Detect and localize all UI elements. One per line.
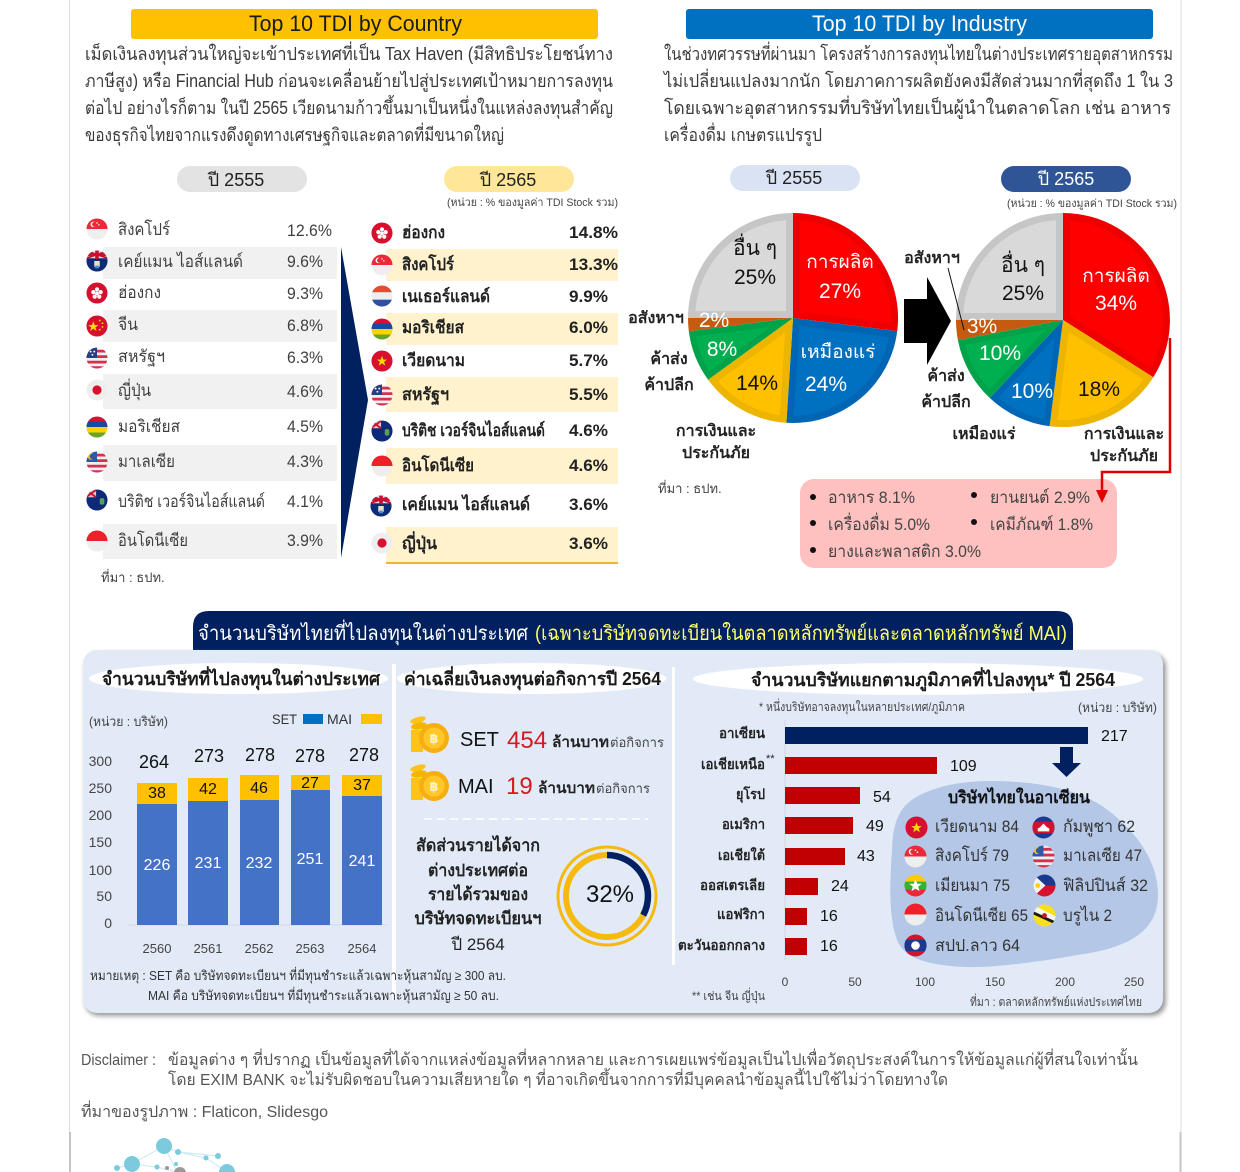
pie chart: 2555: 27%	[819, 280, 861, 303]
note: north Asia: ** เช่น จีน ญี่ปุ่น	[692, 987, 765, 1004]
bar chart: companies by year: MAI	[327, 711, 352, 727]
bar chart: companies by region: 250	[1124, 975, 1144, 989]
pie labels: 2565: ค้าปลีก	[921, 392, 971, 411]
ranking list: 2555: 6.3%	[287, 348, 323, 367]
year pill: country 2565: ปี 2565	[479, 170, 536, 190]
sub-heading: companies abroad: จำนวนบริษัทที่ไปลงทุนในต่างประเทศ	[102, 666, 381, 691]
bar chart: companies by year: 46	[250, 780, 268, 797]
unit note: country: (หน่วย : % ของมูลค่า TDI Stock รวม)	[447, 197, 618, 209]
pie labels: 2565: การเงินและ	[1084, 425, 1164, 443]
panel: Thai companies in ASEAN: มาเลเซีย 47	[1063, 846, 1142, 865]
bar chart: companies by region: 24	[831, 878, 849, 895]
ranking list: 2555: เคย์แมน ไอส์แลนด์	[118, 251, 243, 271]
pie chart: 2565: 34%	[1095, 292, 1137, 315]
pie chart: 2565: อื่น ๆ	[1001, 250, 1045, 277]
icon: coins SET	[409, 715, 449, 753]
pie labels: 2565: อสังหาฯ	[904, 249, 960, 267]
bar chart: companies by year: 264	[139, 752, 169, 772]
ranking list: 2565: 3.6%	[569, 495, 608, 514]
ranking list: 2565: 13.3%	[569, 255, 618, 274]
average: MAI: MAI	[458, 776, 494, 798]
bar chart: companies by year: 100	[89, 862, 112, 878]
text block: industry intro paragraph	[662, 41, 1173, 146]
average: MAI: ล้านบาท	[538, 780, 595, 797]
bar chart: companies by region: อาเซียน	[719, 725, 765, 741]
bar chart: companies by year: 27	[301, 775, 319, 792]
bar chart: companies by year: 241	[349, 853, 375, 870]
bar chart: companies by year: 38	[148, 785, 166, 802]
text block: image credits: ที่มาของรูปภาพ : Flaticon, Slidesgo	[81, 1100, 328, 1122]
average: SET: ล้านบาท	[552, 734, 609, 751]
bar chart: companies by region: 16	[820, 938, 838, 955]
bar chart: companies by region: 0	[782, 975, 789, 989]
text block: foreign income share: ปี 2564	[450, 935, 505, 954]
donut chart: 32%: 32%	[586, 881, 634, 908]
panel: Thai companies in ASEAN: สปป.ลาว 64	[935, 936, 1020, 955]
ranking list: 2565: บริติช เวอร์จินไอส์แลนด์	[402, 420, 545, 440]
callout: manufacturing breakdown: เคมีภัณฑ์ 1.8%	[990, 515, 1093, 534]
ranking list: 2555: สหรัฐฯ	[118, 347, 165, 367]
bar chart: companies by region: 200	[1055, 975, 1075, 989]
bar chart: companies by year: 278	[245, 745, 275, 765]
panel: Thai companies in ASEAN	[890, 781, 1158, 967]
unit note: industry: (หน่วย : % ของมูลค่า TDI Stock รวม)	[1007, 198, 1177, 210]
section banner: Thai companies abroad	[193, 611, 1073, 651]
pie chart: 2555: 25%	[734, 266, 776, 289]
text block: country intro paragraph: เม็ดเงินลงทุนส่วนใหญ่จะเข้าประเทศที่เป็น Tax Haven (มีสิทธิประโยชน์ทาง	[85, 41, 613, 65]
bar chart: companies by region: อเมริกา	[722, 816, 765, 832]
bar chart: companies by year: 231	[195, 855, 221, 872]
pie chart: 2555	[688, 213, 898, 423]
bar chart: companies by year: 278	[349, 745, 379, 765]
average: SET	[460, 727, 664, 754]
pie labels: 2555	[628, 309, 756, 462]
ranking list: 2565: สหรัฐฯ	[402, 385, 449, 406]
text block: disclaimer: ข้อมูลต่าง ๆ ที่ปรากฏ เป็นข้อมูลที่ได้จากแหล่งข้อมูลที่หลากหลาย และการเผยแพร่ข้อมูลเป็นไปเพื่อวัตถุประสงค์ในการให้ข้อมูลแก่ผู้ที่สนใจเท่านั้น	[168, 1048, 1138, 1070]
ranking list: 2565: 5.7%	[569, 351, 608, 370]
text block: industry intro paragraph: ไม่เปลี่ยนแปลงมากนัก โดยภาคการผลิตยังคงมีสัดส่วนมากที่สุดถึง 1 ใน 3	[662, 68, 1173, 92]
sub-heading: companies by region	[693, 663, 1143, 695]
source note: country: ที่มา : ธปท.	[101, 569, 165, 585]
bar chart: companies by year: 50	[96, 888, 112, 904]
panel: Thai companies in ASEAN: ฟิลิปปินส์ 32	[1063, 876, 1148, 895]
bar chart: companies by region: ออสเตรเลีย	[700, 877, 765, 893]
pie chart: 2565: 10%	[979, 342, 1021, 365]
bar chart: companies by region: 49	[866, 818, 884, 835]
panel: Thai companies in ASEAN: เมียนมา 75	[935, 876, 1010, 895]
bar chart: companies by year: 250	[89, 780, 112, 796]
sub-heading: companies abroad	[89, 663, 388, 694]
bar chart: companies by region	[678, 720, 1144, 989]
bar chart: companies by year: 2561	[194, 941, 222, 956]
ranking list: 2555: 12.6%	[287, 221, 332, 240]
pie chart: 2565: 3%	[967, 315, 997, 338]
callout: manufacturing breakdown: เครื่องดื่ม 5.0%	[828, 512, 930, 534]
pie chart: 2565: 10%	[1011, 380, 1053, 403]
panel: Thai companies in ASEAN: กัมพูชา 62	[1063, 817, 1135, 837]
note: multi-country: * หนึ่งบริษัทอาจลงทุนในหลายประเทศ/ภูมิภาค	[759, 698, 965, 715]
text block: disclaimer	[81, 1048, 1138, 1090]
ranking list: 2565: 5.5%	[569, 385, 608, 404]
pie chart: 2565	[956, 213, 1170, 427]
year pill: industry 2565: ปี 2565	[1037, 169, 1094, 189]
bar chart: companies by region: เอเชียเหนือ	[701, 756, 765, 772]
ranking list: 2565: ฮ่องกง	[402, 223, 445, 242]
pie labels: 2555: อสังหาฯ	[628, 309, 684, 327]
ranking list: 2555: ฮ่องกง	[118, 283, 161, 302]
pie chart: 2555: 8%	[707, 338, 737, 361]
ranking list: 2555: ญี่ปุ่น	[118, 378, 151, 401]
icon: coins MAI	[409, 763, 449, 801]
bar chart: companies by year: 278	[295, 746, 325, 766]
unit note: companies: (หน่วย : บริษัท)	[1078, 700, 1157, 715]
pie chart: 2555: 2%	[699, 309, 729, 332]
year pill: industry 2555	[730, 165, 860, 191]
ranking list: 2555	[86, 218, 337, 559]
sub-heading: average investment	[397, 663, 666, 694]
section banner: Thai companies abroad: จำนวนบริษัทไทยที่ไปลงทุนในต่างประเทศ	[198, 619, 528, 646]
ranking list: 2555: จีน	[118, 315, 138, 334]
pie labels: 2565: ประกันภัย	[1090, 447, 1158, 465]
ranking list: 2555: บริติช เวอร์จินไอส์แลนด์	[118, 491, 265, 511]
bar chart: companies by year: 251	[297, 851, 323, 868]
bar chart: companies by region: 54	[873, 789, 891, 806]
ranking list: 2565: สิงคโปร์	[402, 254, 455, 274]
pie labels: 2565: เหมืองแร่	[953, 425, 1016, 443]
ranking list: 2555: สิงคโปร์	[118, 219, 170, 239]
average: MAI	[458, 773, 650, 800]
bar chart: companies by year: SET	[272, 711, 297, 727]
text block: industry intro paragraph: โดยเฉพาะอุตสาหกรรมที่บริษัทไทยเป็นผู้นำในตลาดโลก เช่น อาหาร	[664, 95, 1171, 119]
year pill: industry 2555: ปี 2555	[765, 168, 822, 188]
bar chart: companies by region: 43	[857, 848, 875, 865]
section heading: Top 10 TDI by Country: Top 10 TDI by Country	[249, 11, 462, 36]
note: SET and MAI definitions	[90, 967, 506, 1004]
ranking list: 2555: 4.1%	[287, 492, 323, 511]
average: SET: ต่อกิจการ	[610, 735, 664, 750]
section heading: Top 10 TDI by Country	[131, 9, 598, 39]
average: MAI: ต่อกิจการ	[596, 781, 650, 796]
bar chart: companies by year: 2563	[296, 941, 324, 956]
bar chart: companies by year: 37	[353, 777, 371, 794]
section heading: Top 10 TDI by Industry	[686, 9, 1153, 39]
callout: manufacturing breakdown: ยานยนต์ 2.9%	[990, 488, 1090, 507]
ranking list: 2555: 9.6%	[287, 252, 323, 271]
arrow: ASEAN to breakdown	[1052, 747, 1081, 777]
donut chart: 32%	[558, 847, 656, 945]
year pill: country 2555	[177, 166, 307, 192]
sub-heading: average investment: ค่าเฉลี่ยเงินลงทุนต่อกิจการปี 2564	[404, 666, 661, 691]
bar chart: companies by region: ยุโรป	[736, 785, 765, 803]
ranking list: 2565: อินโดนีเซีย	[402, 455, 474, 475]
bar chart: companies by region: 217	[1101, 728, 1128, 745]
text block: foreign income share: สัดส่วนรายได้จาก	[416, 835, 540, 855]
bar chart: companies by year: 2564	[348, 941, 376, 956]
text block: country intro paragraph: ต่อไป อย่างไรก็ตาม ในปี 2565 เวียดนามก้าวขึ้นมาเป็นหนึ่งในแหล่งลงทุนสำคัญ	[85, 95, 613, 119]
text block: foreign income share: รายได้รวมของ	[428, 884, 528, 904]
average: SET: SET	[460, 729, 499, 751]
text block: country intro paragraph	[85, 41, 613, 146]
text block: disclaimer: โดย EXIM BANK จะไม่รับผิดชอบในความเสียหายใด ๆ ที่อาจเกิดขึ้นจากการที่มีบุคคลนำข้อมูลนี้ไปใช้ไม่ว่าโดยทางใด	[168, 1068, 948, 1090]
arrow: 2555 to 2565 ranking	[341, 247, 368, 558]
pie chart: 2555: เหมืองแร่	[801, 342, 875, 363]
panel: Thai companies in ASEAN: บรูไน 2	[1063, 905, 1112, 926]
bar chart: companies by region: 100	[915, 975, 935, 989]
bar chart: companies by year: 200	[89, 807, 112, 823]
callout: manufacturing breakdown	[800, 479, 1117, 568]
pie chart: 2565: การผลิต	[1082, 266, 1150, 287]
year pill: industry 2565	[1001, 166, 1131, 192]
ranking list: 2565	[370, 222, 618, 564]
bar chart: companies by year: 226	[144, 857, 170, 874]
callout: manufacturing breakdown: อาหาร 8.1%	[828, 488, 915, 507]
ranking list: 2565: เวียดนาม	[402, 350, 465, 370]
bar chart: companies by year: 0	[104, 915, 112, 931]
ranking list: 2565: 9.9%	[569, 287, 608, 306]
panel: Thai companies in ASEAN: สิงคโปร์ 79	[935, 845, 1009, 865]
ranking list: 2565: 4.6%	[569, 421, 608, 440]
panel: Thai companies in ASEAN: อินโดนีเซีย 65	[935, 905, 1028, 925]
source note: SET: ที่มา : ตลาดหลักทรัพย์แห่งประเทศไทย	[970, 993, 1142, 1009]
bar chart: companies by year: 42	[199, 781, 217, 798]
sub-heading: companies by region: จำนวนบริษัทแยกตามภูมิภาคที่ไปลงทุน* ปี 2564	[751, 667, 1115, 692]
year pill: country 2565	[444, 166, 574, 192]
text block: foreign income share: ต่างประเทศต่อ	[428, 861, 528, 880]
ranking list: 2555: 4.6%	[287, 382, 323, 401]
pie chart: 2565: 25%	[1002, 282, 1044, 305]
ranking list: 2565: 6.0%	[569, 318, 608, 337]
section heading: Top 10 TDI by Industry: Top 10 TDI by Industry	[812, 11, 1027, 36]
pie chart: 2555: อื่น ๆ	[733, 233, 777, 260]
pie chart: 2565: 18%	[1078, 378, 1120, 401]
pie labels: 2555: ประกันภัย	[682, 444, 750, 462]
note: SET and MAI definitions: หมายเหตุ : SET คือ บริษัทจดทะเบียนฯ ที่มีทุนชำระแล้วเฉพาะหุ้นสามัญ ≥ 300 ลบ.	[90, 967, 506, 984]
text block: foreign income share: บริษัทจดทะเบียนฯ	[414, 908, 542, 928]
text block: industry intro paragraph: เครื่องดื่ม เกษตรแปรรูป	[664, 122, 822, 146]
arrow: 2555 to 2565 pie	[904, 277, 951, 365]
ranking list: 2555: มอริเชียส	[118, 417, 181, 436]
pie chart: 2555: 14%	[736, 372, 778, 395]
panel: Thai companies in ASEAN: เวียดนาม 84	[935, 817, 1019, 836]
bar chart: companies by year	[89, 711, 388, 956]
bar chart: companies by region: 150	[985, 975, 1005, 989]
text block: disclaimer: Disclaimer :	[81, 1052, 156, 1069]
pie labels: 2565: ค้าส่ง	[927, 367, 965, 385]
pie labels: 2555: การเงินและ	[676, 422, 756, 440]
ranking list: 2565: 3.6%	[569, 534, 608, 553]
bar chart: companies by region: 16	[820, 908, 838, 925]
note: SET and MAI definitions: MAI คือ บริษัทจดทะเบียนฯ ที่มีทุนชำระแล้วเฉพาะหุ้นสามัญ ≥ 50 ลบ.	[148, 987, 499, 1004]
year pill: country 2555: ปี 2555	[207, 170, 264, 190]
text block: country intro paragraph: ของธุรกิจไทยจากแรงดึงดูดทางเศรษฐกิจและตลาดที่มีขนาดใหญ่	[85, 122, 504, 146]
ranking list: 2565: 4.6%	[569, 456, 608, 475]
ranking list: 2565: มอริเชียส	[402, 317, 465, 337]
panel: Thai companies in ASEAN: บริษัทไทยในอาเซียน	[948, 787, 1090, 807]
ranking list: 2565: 14.8%	[569, 223, 618, 242]
text block: foreign income share	[414, 835, 542, 954]
bar chart: companies by region: แอฟริกา	[717, 906, 765, 922]
section banner: Thai companies abroad: (เฉพาะบริษัทจดทะเบียนในตลาดหลักทรัพย์และตลาดหลักทรัพย์ MAI)	[535, 622, 1067, 645]
average: MAI: 19	[506, 773, 533, 800]
ranking list: 2555: อินโดนีเซีย	[118, 530, 188, 550]
bar chart: companies by year: (หน่วย : บริษัท)	[89, 714, 168, 729]
icon: network graphic	[114, 1138, 235, 1172]
bar chart: companies by year: 2560	[143, 941, 171, 956]
ranking list: 2555: 4.5%	[287, 417, 323, 436]
bar chart: companies by year: 2562	[245, 941, 273, 956]
bar chart: companies by year: 232	[246, 855, 272, 872]
text block: country intro paragraph: ภาษีสูง) หรือ Financial Hub ก่อนจะเคลื่อนย้ายไปสู่ประเทศเป้าหมายการลงทุน	[85, 68, 613, 92]
average: SET: 454	[507, 727, 547, 754]
ranking list: 2555: 4.3%	[287, 452, 323, 471]
ranking list: 2565: เคย์แมน ไอส์แลนด์	[402, 494, 530, 514]
source note: industry: ที่มา : ธปท.	[658, 480, 722, 496]
pie labels: 2555: ค้าปลีก	[644, 375, 694, 394]
bar chart: companies by year: 150	[89, 834, 112, 850]
panel: company statistics	[83, 650, 1166, 1016]
pie labels: 2565	[904, 249, 1164, 465]
callout: manufacturing breakdown: ยางและพลาสติก 3.0%	[828, 542, 981, 561]
ranking list: 2565: ญี่ปุ่น	[402, 531, 437, 554]
ranking list: 2555: 6.8%	[287, 316, 323, 335]
bar chart: companies by region: **	[766, 753, 775, 765]
bar chart: companies by year: 300	[89, 753, 112, 769]
ranking list: 2555: 3.9%	[287, 531, 323, 550]
ranking list: 2565: เนเธอร์แลนด์	[402, 286, 490, 306]
bar chart: companies by year: 273	[194, 746, 224, 766]
pie labels: 2555: ค้าส่ง	[650, 350, 688, 368]
ranking list: 2555: มาเลเซีย	[118, 452, 175, 471]
bar chart: companies by region: 50	[848, 975, 862, 989]
bar chart: companies by region: 109	[950, 758, 977, 775]
pie chart: 2555: การผลิต	[806, 252, 874, 273]
arrow: manufacturing to breakdown	[1096, 338, 1170, 503]
bar chart: companies by region: เอเชียใต้	[718, 846, 765, 863]
bar chart: companies by region: ตะวันออกกลาง	[678, 937, 765, 953]
ranking list: 2555: 9.3%	[287, 284, 323, 303]
pie chart: 2555: 24%	[805, 373, 847, 396]
